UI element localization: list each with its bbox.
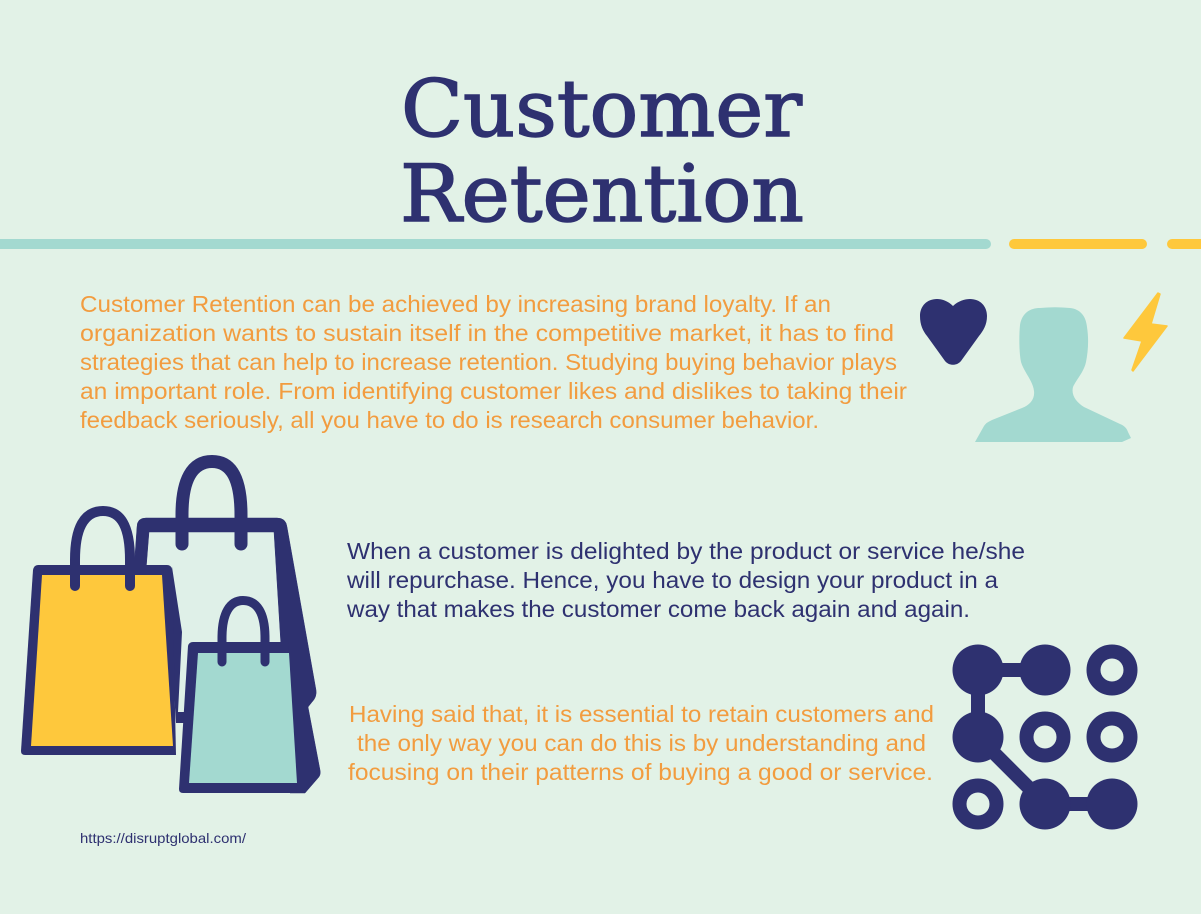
icon: shopping bags [21,462,320,793]
intro paragraph: feedback seriously, all you have to do is research consumer behavior. [80,407,819,433]
title: Retention [400,148,804,240]
back bag [134,462,320,793]
paragraph: repurchase [346,538,1025,622]
yellow bag [21,511,176,755]
icon: customer silhouette [975,307,1131,442]
paragraph: buying patterns: focusing on their patterns of buying a good or service. [348,759,933,785]
paragraph: buying patterns: Having said that, it is essential to retain customers and [349,701,934,727]
paragraph: repurchase: When a customer is delighted by the product or service he/she [347,538,1025,564]
source url: https://disruptglobal.com/ [80,830,246,846]
title divider bars [0,239,1201,249]
paragraph: repurchase: way that makes the customer come back again and again. [346,596,970,622]
paragraph: repurchase: will repurchase. Hence, you have to design your product in a [346,567,998,593]
intro paragraph [80,291,907,433]
intro paragraph: an important role. From identifying customer likes and dislikes to taking their [80,378,907,404]
intro paragraph: organization wants to sustain itself in the competitive market, it has to find [80,320,894,346]
teal bag [179,600,297,793]
intro paragraph: Customer Retention can be achieved by increasing brand loyalty. If an [80,291,831,317]
icon: lightning bolt [1124,293,1167,371]
icon: heart [920,299,987,365]
paragraph: buying patterns: the only way you can do this is by understanding and [357,730,926,756]
icon: connected dot pattern [952,644,1138,830]
title [400,63,804,240]
paragraph: buying patterns [348,701,934,785]
intro paragraph: strategies that can help to increase retention. Studying buying behavior plays [80,349,897,375]
title: Customer [401,63,802,155]
